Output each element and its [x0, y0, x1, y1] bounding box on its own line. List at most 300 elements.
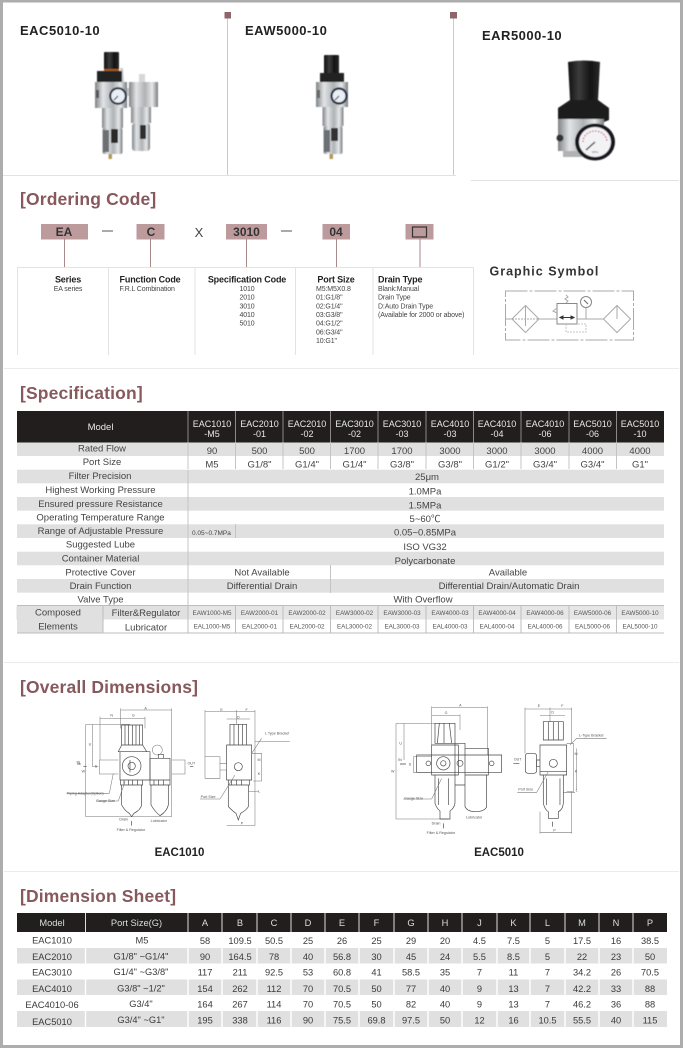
drawing: EAC5010 dimensions: IN [398, 758, 402, 762]
spec values: ISO VG32 [403, 542, 447, 553]
row EAC4010-06: 13 [508, 1000, 519, 1010]
heading: Specification: [Specification] [20, 383, 143, 403]
row EAC1010: 4.5 [473, 936, 486, 946]
drawing: EAC1010 dimensions: P [241, 821, 244, 825]
dimension table header: D [305, 918, 312, 928]
row EAC1010: EAC1010 [32, 936, 72, 946]
row EAC3010: 7 [545, 968, 550, 978]
code box C [136, 224, 164, 240]
row EAC1010: 50.5 [265, 936, 283, 946]
icon: EAW5000 filter regulator photo [316, 55, 348, 159]
drawing: EAC1010 dimensions: D [237, 715, 240, 719]
row EAC4010-06: G3/4" [129, 999, 153, 1009]
drawing: EAC5010 dimensions: W [391, 770, 395, 774]
spec table header: -04 [490, 429, 504, 439]
row EAC4010: 33 [611, 984, 621, 994]
column: Port Size: 10:G1" [316, 338, 337, 345]
dimension table header: Port Size(G) [111, 918, 162, 928]
spec values: With Overflow [393, 594, 453, 606]
heading: Ordering Code: [Ordering Code] [20, 189, 156, 209]
row EAC5010: 115 [643, 1016, 657, 1026]
composed element model numbers: EAL4000-03 [432, 624, 468, 630]
column: Specification Code: 4010 [239, 312, 255, 319]
drawing: EAC1010 dimensions: G [132, 714, 135, 718]
row EAC4010: 50 [371, 984, 382, 994]
row EAC1010: 20 [440, 936, 450, 946]
row EAC2010: 22 [577, 952, 587, 962]
row EAC2010: 164.5 [228, 952, 252, 962]
composed element model numbers: EAW5000-06 [574, 610, 612, 617]
column: Function Code: F.R.L Combination [120, 286, 175, 293]
row EAC1010: 29 [406, 936, 416, 946]
spec table header: -10 [633, 429, 647, 439]
column: Drain Type: D:Auto Drain Type [378, 303, 433, 310]
drawing: EAC1010 dimensions: K [258, 772, 261, 776]
row EAC2010: 56.8 [333, 952, 351, 962]
spec table header: -01 [253, 429, 266, 439]
drawing: EAC1010 dimensions: Filter & Regulator [117, 828, 146, 832]
spec values: G1/2" [485, 460, 509, 470]
row EAC4010: 9 [477, 984, 482, 994]
drawing: EAC1010 dimensions: L [258, 789, 260, 793]
label EAC1010: EAC1010 [155, 847, 204, 859]
row EAC5010: 40 [611, 1016, 621, 1026]
spec values: Differential Drain/Automatic Drain [439, 581, 579, 592]
spec table header: EAC1010 [193, 419, 231, 429]
spec values: G1/4" [295, 460, 319, 470]
row EAC1010: 109.5 [228, 936, 252, 946]
dimension table header: B [237, 918, 243, 928]
row EAC1010: 58 [200, 936, 210, 946]
spec row labels [35, 443, 180, 634]
row EAC1010: M5 [136, 936, 148, 946]
dimension table header: L [545, 918, 550, 928]
dimension table header: Model [39, 918, 65, 928]
row EAC4010-06: 36 [611, 1000, 621, 1010]
spec values: 4000 [629, 446, 651, 457]
spec table header: -06 [586, 429, 599, 439]
row EAC3010: 53 [303, 968, 313, 978]
composed element model numbers: EAW5000-10 [621, 610, 659, 617]
code box 04: 04 [329, 225, 343, 239]
row EAC2010: 78 [269, 952, 279, 962]
spec row labels: Ensured pressure Resistance [38, 499, 163, 510]
drawing: EAC5010 dimensions: Drain [432, 821, 440, 825]
drawing: EAC5010 dimensions: A [459, 704, 462, 708]
column: Specification Code [208, 274, 286, 328]
composed element model numbers: EAL3000-02 [337, 624, 373, 630]
spec values: 25μm [415, 472, 439, 483]
row EAC3010: 26 [611, 968, 621, 978]
row EAC1010: 5 [545, 936, 550, 946]
code box 04 [322, 224, 350, 240]
drawing: EAC5010 dimensions: E [538, 704, 541, 708]
drawing: EAC5010 dimensions: S [409, 763, 412, 767]
row EAC1010: 16 [611, 936, 621, 946]
drawing: EAC5010 dimensions: G [445, 711, 448, 715]
row EAC4010-06: 88 [645, 1000, 655, 1010]
row EAC5010: 195 [197, 1016, 213, 1026]
row EAC4010: EAC4010 [32, 984, 72, 994]
row EAC3010: 60.8 [333, 968, 351, 978]
row EAC4010: G3/8" ~1/2" [117, 984, 165, 994]
row EAC4010-06 [25, 999, 655, 1010]
spec row labels: Filter&Regulator [112, 608, 180, 619]
row EAC2010: 90 [200, 952, 210, 962]
row EAC5010: 16 [508, 1016, 519, 1026]
row EAC5010: 90 [303, 1016, 313, 1026]
row EAC3010: 35 [440, 968, 450, 978]
dimension table header: H [442, 918, 448, 928]
column: Port Size: Port Size [317, 274, 355, 284]
row EAC4010-06: 40 [440, 1000, 450, 1010]
column: Drain Type [378, 274, 464, 319]
composed element model numbers: EAW4000-06 [526, 610, 564, 617]
row EAC4010-06: EAC4010-06 [25, 1000, 79, 1010]
row EAC3010 [32, 967, 659, 978]
composed element model numbers: EAL4000-04 [479, 624, 515, 630]
column: Drain Type: (Available for 2000 or above) [378, 312, 464, 319]
composed element model numbers: EAL4000-06 [527, 624, 563, 630]
drawing: EAC5010 dimensions: L [576, 789, 578, 793]
code box EA: EA [56, 225, 73, 239]
row EAC4010-06: 267 [232, 1000, 248, 1010]
composed element model numbers: EAL3000-03 [384, 624, 420, 630]
row EAC2010: 40 [303, 952, 313, 962]
dimension table header: N [613, 918, 619, 928]
spec values: 500 [299, 446, 315, 457]
drawing: EAC5010 dimensions: K [575, 769, 578, 773]
spec values: 1.5MPa [409, 500, 442, 512]
row EAC4010: 262 [232, 984, 248, 994]
drawing: EAC5010 dimensions: F [561, 704, 564, 708]
composed element model numbers: EAL2000-01 [242, 624, 278, 630]
column: Specification Code: 5010 [239, 321, 255, 328]
code box 3010 [226, 224, 267, 240]
panel: ordering code [17, 224, 474, 355]
column: Port Size: 04:G1/2" [316, 321, 343, 328]
row EAC4010-06: 164 [197, 1000, 213, 1010]
drawing: EAC1010 dimensions: Lubricator [151, 819, 168, 823]
dimension table header: J [477, 918, 482, 928]
spec values: 1.0MPa [409, 486, 442, 498]
row EAC1010 [32, 936, 659, 946]
drawing: EAC1010 dimensions: Gauge Size [96, 799, 115, 803]
row EAC2010: G1/8" ~G1/4" [114, 952, 168, 962]
row EAC4010-06: 70.5 [333, 1000, 351, 1010]
product title EAC5010-10: EAC5010-10 [20, 23, 100, 38]
row EAC4010-06: 9 [477, 1000, 482, 1010]
row EAC5010: 10.5 [538, 1016, 557, 1026]
spec values: 0.05~0.7MPa [192, 530, 231, 537]
row EAC3010: G1/4" ~G3/8" [114, 967, 168, 977]
dimension table header: C [271, 918, 278, 928]
composed element model numbers: EAW4000-03 [431, 610, 469, 617]
row EAC1010: 25 [371, 936, 382, 946]
row EAC5010: 12 [474, 1016, 485, 1026]
row EAC4010: 112 [267, 984, 281, 994]
column: Specification Code: 3010 [239, 303, 255, 310]
row EAC2010: 8.5 [507, 952, 520, 962]
spec row labels: Container Material [62, 554, 139, 564]
row EAC2010: 24 [440, 952, 450, 962]
product title EAW5000-10: EAW5000-10 [245, 23, 327, 38]
row EAC3010: 7 [477, 968, 482, 978]
row EAC3010: EAC3010 [32, 968, 72, 978]
spec table [17, 411, 664, 634]
row EAC3010: 58.5 [402, 968, 420, 978]
product title EAR5000-10: EAR5000-10 [482, 28, 562, 43]
row EAC2010: 50 [645, 952, 655, 962]
spec table header: EAC4010 [431, 419, 469, 429]
spec values: 3000 [439, 446, 461, 457]
row EAC4010: 70 [303, 984, 313, 994]
row EAC2010: 5 [545, 952, 550, 962]
row EAC1010: 7.5 [507, 936, 520, 946]
dimension table header: P [647, 918, 653, 928]
row EAC5010 [32, 1015, 657, 1027]
spec table header: EAC5010 [573, 419, 612, 429]
spec table header: EAC4010 [526, 419, 564, 429]
drawing: EAC1010 dimensions: N [110, 714, 113, 718]
composed element model numbers: EAW4000-04 [478, 610, 516, 617]
spec table header: EAC4010 [478, 419, 516, 429]
row EAC4010: 40 [440, 984, 450, 994]
row EAC5010: 97.5 [402, 1016, 420, 1026]
column: Port Size: 06:G3/4" [316, 329, 343, 336]
spec values: Not Available [234, 568, 290, 578]
column: Port Size: 02:G1/4" [316, 303, 343, 310]
spec values: G1" [632, 460, 648, 470]
column: Port Size [316, 274, 355, 345]
row EAC2010: 5.5 [473, 952, 486, 962]
code box 3010: 3010 [233, 225, 260, 239]
row EAC3010: 34.2 [573, 968, 591, 978]
spec values: 4000 [582, 446, 603, 457]
drawing: EAC5010 dimensions: D [551, 710, 554, 714]
column: Port Size: 03:G3/8" [316, 312, 343, 319]
heading: Overall Dimensions: [Overall Dimensions] [20, 677, 198, 697]
column: Specification Code: 2010 [239, 295, 255, 302]
row EAC4010: 77 [406, 984, 416, 994]
spec values: G3/8" [438, 460, 462, 470]
row EAC2010: 45 [406, 952, 416, 962]
drawing: EAC5010 dimensions: Filter & Regulator [427, 831, 456, 835]
row EAC4010: 154 [197, 984, 213, 994]
composed element model numbers: EAW3000-02 [336, 610, 374, 617]
drawing: EAC1010 dimensions: E [220, 708, 223, 712]
spec table header: -06 [538, 429, 552, 439]
spec row labels: Lubricator [125, 622, 167, 634]
spec values: 3000 [534, 446, 556, 457]
drawing: EAC5010 dimensions: M [574, 752, 578, 756]
column: Drain Type: Drain Type [378, 295, 411, 302]
spec row labels: Composed [35, 608, 81, 618]
row EAC4010-06: 82 [406, 1000, 416, 1010]
row EAC1010: 17.5 [573, 936, 591, 946]
composed element model numbers: EAW2000-01 [241, 610, 279, 617]
row EAC5010: 338 [232, 1016, 248, 1026]
spec table header: -M5 [204, 429, 220, 439]
spec values [192, 446, 651, 606]
row EAC4010-06: 46.2 [573, 1000, 591, 1010]
drawing: EAC1010 dimensions: Drain [119, 817, 128, 821]
code box C: C [147, 225, 156, 239]
spec row labels: Port Size [83, 457, 121, 468]
drawing: EAC5010 dimensions [391, 704, 607, 835]
spec row labels: Valve Type [77, 594, 124, 606]
row EAC1010: 25 [303, 936, 313, 946]
drawing: EAC1010 dimensions: A [144, 706, 147, 710]
row EAC4010-06: 114 [267, 1000, 281, 1010]
drawing: EAC1010 dimensions: OUT [187, 761, 196, 765]
spec values: 90 [207, 446, 217, 457]
column: Port Size: 01:G1/8" [316, 295, 343, 302]
row EAC4010-06: 50 [371, 1000, 382, 1010]
row EAC3010: 211 [233, 968, 247, 978]
row EAC1010: 38.5 [641, 936, 659, 946]
spec table header: -02 [348, 429, 361, 439]
drawing: EAC1010 dimensions: U [89, 743, 92, 747]
composed element model numbers: EAW3000-03 [383, 610, 421, 617]
spec values: 3000 [486, 446, 508, 457]
column: Series: Series [55, 274, 81, 284]
spec values: 500 [252, 446, 267, 457]
column: Function Code [120, 274, 181, 293]
dimension table [17, 913, 667, 1027]
column: Port Size: M5:M5X0.8 [316, 286, 351, 293]
row EAC1010: 26 [337, 936, 347, 946]
spec values: Polycarbonate [395, 556, 455, 567]
drawing: EAC5010 dimensions: Gauge Size [404, 796, 423, 800]
row EAC5010: G3/4" ~G1" [117, 1015, 165, 1025]
spec table header: -03 [443, 429, 457, 439]
spec row labels: Range of Adjustable Pressure [38, 526, 163, 537]
row EAC5010: 50 [440, 1016, 450, 1026]
spec table header [17, 411, 664, 442]
column: Specification Code: 1010 [239, 286, 255, 293]
drawing: EAC5010 dimensions: U [399, 741, 402, 745]
row EAC3010: 41 [371, 968, 382, 978]
label EAC5010: EAC5010 [474, 847, 524, 859]
spec table header: EAC3010 [383, 419, 421, 429]
drawing: EAC1010 dimensions: W [82, 769, 86, 773]
dimension table header: A [202, 918, 209, 928]
dimension table header: E [339, 918, 345, 928]
drawing: EAC5010 dimensions: L-Type Bracket [579, 734, 604, 738]
composed element model numbers: EAW1000-M5 [193, 610, 232, 617]
drawing: EAC1010 dimensions: IN [77, 760, 81, 764]
spec values: G1/8" [248, 460, 271, 470]
spec values: Available [489, 568, 527, 578]
drawing: EAC5010 dimensions: Lubricator [466, 816, 483, 820]
panel: products [3, 12, 679, 180]
column: Specification Code: Specification Code [208, 274, 286, 284]
code box drain [406, 224, 434, 240]
composed element model numbers: EAL2000-02 [289, 624, 325, 630]
row EAC4010-06: 70 [303, 1000, 313, 1010]
spec row labels: Elements [38, 622, 78, 632]
dimension table header [17, 913, 667, 932]
drawing: EAC1010 dimensions: L Type Bracket [265, 732, 289, 736]
spec row labels: Operating Temperature Range [36, 512, 165, 524]
spec values: G3/4" [581, 460, 604, 470]
row EAC4010: 88 [645, 984, 655, 994]
icon: EAR5000 regulator photo [556, 60, 615, 160]
spec values: 1700 [344, 446, 365, 457]
spec values: 1700 [391, 446, 413, 457]
row EAC5010: 116 [267, 1016, 281, 1026]
heading: Dimension Sheet: [Dimension Sheet] [20, 886, 176, 906]
row EAC5010: 55.5 [573, 1016, 591, 1026]
drawing: EAC5010 dimensions: OUT [514, 757, 522, 761]
spec row labels: Filter Precision [69, 471, 131, 482]
spec row labels: Highest Working Pressure [45, 485, 156, 496]
row EAC2010: 23 [611, 952, 621, 962]
row EAC4010: 13 [508, 984, 519, 994]
icon: EAC5010 filter regulator lubricator photo [95, 52, 158, 159]
column: Series [54, 274, 83, 293]
dimension table header: F [374, 918, 380, 928]
row EAC5010: 69.8 [367, 1016, 386, 1026]
composed element model numbers [193, 610, 659, 630]
drawing: EAC1010 dimensions: M [257, 758, 261, 762]
spec row labels: Rated Flow [78, 443, 126, 454]
row EAC2010: EAC2010 [32, 952, 72, 962]
column: Function Code: Function Code [120, 274, 181, 284]
spec table header: EAC2010 [288, 419, 326, 429]
composed element model numbers: EAL5000-10 [622, 624, 658, 630]
spec table header: EAC2010 [240, 419, 279, 429]
code box EA [41, 224, 88, 240]
heading: Graphic Symbol: Graphic Symbol [490, 264, 599, 278]
spec table header: EAC3010 [335, 419, 374, 429]
row EAC3010: 117 [198, 968, 212, 978]
spec values: Differential Drain [227, 581, 297, 592]
dimension table header: M [578, 918, 586, 928]
drawing: EAC1010 dimensions: F [246, 708, 249, 712]
row EAC3010: 11 [509, 968, 518, 978]
column: Drain Type: Drain Type [378, 274, 422, 284]
row EAC2010: 30 [371, 952, 382, 962]
row EAC3010: 92.5 [265, 968, 283, 978]
drawing: EAC1010 dimensions: S [95, 765, 98, 769]
separator X: X [195, 225, 204, 240]
drawing: EAC5010 dimensions: P [553, 828, 556, 832]
row EAC2010 [32, 952, 655, 962]
spec values: G1/4" [343, 460, 366, 470]
composed element model numbers: EAL1000-M5 [194, 624, 231, 630]
spec table header: -03 [395, 429, 409, 439]
row EAC4010: 7 [545, 984, 550, 994]
drawing: EAC1010 dimensions: Piping Adapter(Option) [67, 791, 104, 795]
row EAC4010-06: 7 [545, 1000, 550, 1010]
row EAC4010: 70.5 [333, 984, 351, 994]
spec row labels: Suggested Lube [66, 540, 135, 550]
composed element model numbers: EAL5000-06 [575, 624, 611, 630]
drawing: EAC5010 dimensions: Port Size [518, 787, 533, 791]
drawing: EAC1010 dimensions: Port Size [201, 795, 215, 799]
dimension table header: K [510, 918, 517, 928]
icon: EAR5000 regulator photo: MPa [592, 150, 598, 154]
column: Drain Type: Blank:Manual [378, 286, 420, 293]
column: Series: EA series [54, 286, 83, 293]
dimension table header: G [407, 918, 415, 928]
spec values: G3/8" [390, 460, 414, 470]
row EAC5010: 75.5 [333, 1016, 351, 1026]
row EAC3010: 70.5 [641, 968, 659, 978]
spec values: M5 [205, 460, 219, 470]
